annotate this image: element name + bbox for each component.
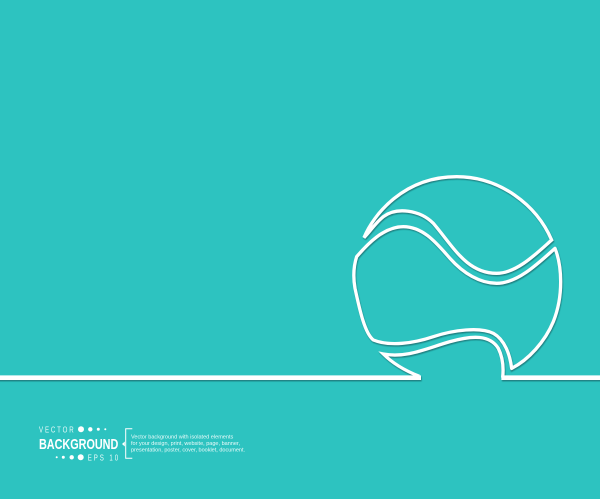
- ground line: [0, 337, 600, 378]
- description text: presentation, poster, cover, booklet, document.: [131, 448, 245, 454]
- bracket arrow: [122, 442, 125, 446]
- logo: vector background eps 10: [39, 424, 245, 463]
- description text: Vector background with isolated elements: [131, 434, 234, 440]
- eps label: EPS 10: [88, 453, 120, 463]
- description text: [131, 434, 245, 454]
- shadow of line art: [0, 178, 600, 379]
- tennis ball lower body: [354, 227, 561, 368]
- bottom dots: [56, 454, 84, 460]
- bracket: [126, 429, 132, 458]
- top dots: [78, 426, 106, 432]
- description text: for your design, print, website, page, banner,: [131, 441, 240, 447]
- vector label: VECTOR: [39, 424, 76, 435]
- background heading: BACKGROUND: [39, 437, 118, 453]
- tennis ball upper segment: [364, 177, 552, 273]
